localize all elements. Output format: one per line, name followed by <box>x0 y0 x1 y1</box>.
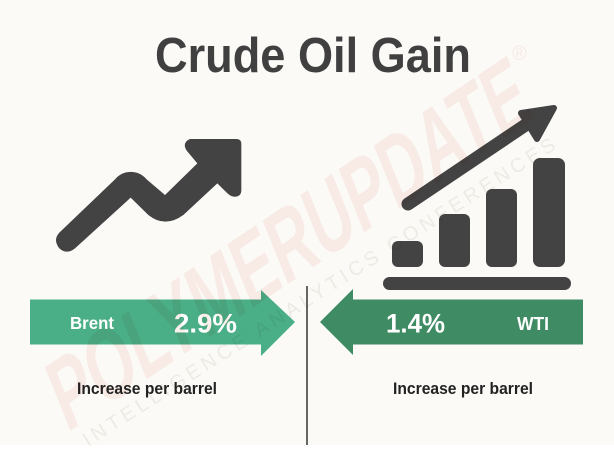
divider <box>306 286 308 445</box>
watermark: ® <box>512 43 527 65</box>
caption: WTI increase: Increase per barrel <box>393 380 533 398</box>
value: 2.9%: 2.9% <box>174 308 237 338</box>
title: Crude Oil Gain <box>155 29 471 83</box>
icon: bar chart with rising arrow <box>383 108 571 290</box>
label: WTI: WTI <box>517 314 549 334</box>
label: Brent: Brent <box>70 313 114 333</box>
caption: Brent increase: Increase per barrel <box>77 380 217 398</box>
panel: WTI arrow <box>320 289 583 355</box>
watermark: INTELLIGENCE ANALYTICS CONFERENCES <box>79 134 560 451</box>
icon: rising zigzag arrow <box>56 139 241 252</box>
panel: Brent arrow <box>30 290 295 356</box>
value: 1.4%: 1.4% <box>386 308 445 338</box>
